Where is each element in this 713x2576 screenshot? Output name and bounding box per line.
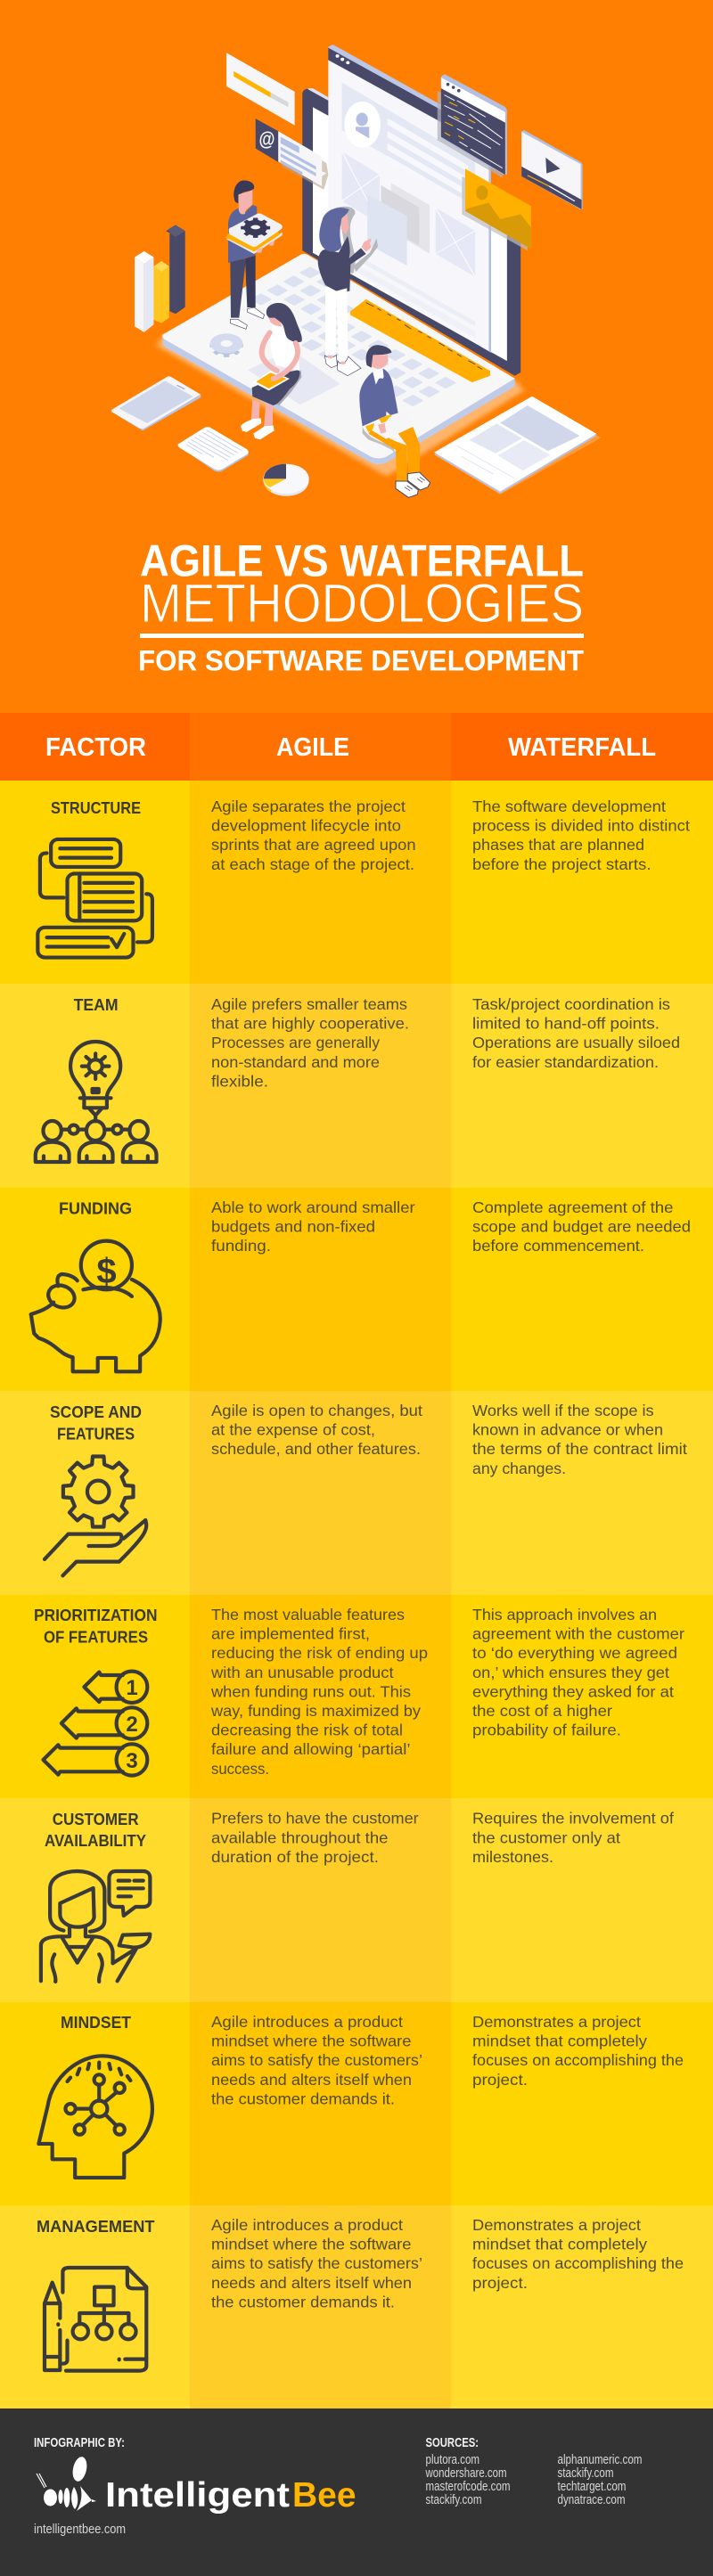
text: waterfall mindset xyxy=(472,2013,684,2089)
card: email: @ xyxy=(259,128,275,151)
text: waterfall structure: phases that are planned xyxy=(472,836,644,854)
text: agile scope: at the expense of cost, xyxy=(211,1421,375,1439)
person: man with books xyxy=(225,180,283,329)
row: funding xyxy=(0,1188,713,1391)
text: agile management xyxy=(211,2216,422,2310)
text: agile team: non-standard and more xyxy=(211,1053,380,1071)
bar chart xyxy=(135,225,185,332)
text: agile prioritization: The most valuable features xyxy=(211,1606,405,1623)
text: waterfall prioritization: the cost of a higher xyxy=(472,1702,612,1720)
sources: techtarget.com xyxy=(558,2480,626,2494)
pie chart xyxy=(263,464,309,496)
icon: head with network xyxy=(38,2056,152,2178)
person: standing woman legs xyxy=(324,287,361,376)
text: waterfall prioritization: This approach involves an xyxy=(472,1606,657,1623)
sources: wondershare.com xyxy=(425,2466,506,2481)
row: team xyxy=(0,984,713,1188)
text: agile funding xyxy=(211,1198,415,1255)
text: agile management: needs and alters itself when xyxy=(211,2274,412,2292)
logo: wordmark xyxy=(105,2476,356,2515)
logo: wordmark: Intelligent xyxy=(105,2476,290,2515)
ruler xyxy=(350,299,490,382)
text: waterfall team xyxy=(472,995,680,1071)
text: waterfall prioritization: to ‘do everything we agreed xyxy=(472,1644,677,1662)
laptop base xyxy=(157,254,524,477)
row: customer availability: CUSTOMER xyxy=(53,1811,139,1828)
text: waterfall scope: known in advance or when xyxy=(472,1421,663,1439)
sources: alphanumeric.com xyxy=(558,2453,642,2467)
text: waterfall mindset: project. xyxy=(472,2071,528,2089)
orange background xyxy=(0,0,713,713)
text: agile management: mindset where the software xyxy=(211,2236,412,2253)
small gear xyxy=(209,333,243,357)
row: management xyxy=(0,2205,713,2408)
text: agile customer: available throughout the xyxy=(211,1828,389,1846)
text: waterfall scope: Works well if the scope is xyxy=(472,1402,654,1419)
table header: WATERFALL xyxy=(508,733,656,762)
text: agile prioritization: when funding runs out. This xyxy=(210,1682,411,1700)
text: agile structure: development lifecycle into xyxy=(211,817,401,835)
text: waterfall customer: milestones. xyxy=(472,1848,553,1866)
text: agile mindset xyxy=(211,2013,422,2107)
person: standing woman xyxy=(318,207,378,293)
icon: customer with speech bubble xyxy=(41,1871,150,1982)
text: waterfall management: focuses on accomplishing the xyxy=(472,2254,684,2272)
text: waterfall management: mindset that completely xyxy=(472,2236,647,2253)
text: waterfall scope: the terms of the contract limit xyxy=(472,1440,687,1458)
text: agile management: Agile introduces a product xyxy=(211,2216,403,2234)
text: agile prioritization: reducing the risk of ending up xyxy=(211,1644,428,1662)
person: sitting man with laptop xyxy=(359,345,430,497)
row: scope and features: SCOPE AND xyxy=(50,1403,142,1421)
text: waterfall management: project. xyxy=(472,2274,528,2292)
text: agile structure: at each stage of the project. xyxy=(211,855,414,873)
title: AGILE VS WATERFALL xyxy=(140,536,584,586)
text: agile mindset: needs and alters itself when xyxy=(211,2071,412,2089)
card: progress bar xyxy=(226,53,295,126)
text: waterfall customer: Requires the involvement of xyxy=(472,1810,674,1828)
icon: numbered arrows: 2 xyxy=(126,1713,138,1737)
icon: numbered arrows xyxy=(43,1672,147,1776)
text: agile structure xyxy=(211,797,416,873)
text: waterfall prioritization: probability of failure. xyxy=(472,1721,621,1739)
row: structure: STRUCTURE xyxy=(51,799,141,817)
text: waterfall funding: before commencement. xyxy=(472,1237,644,1255)
text: waterfall funding: Complete agreement of the xyxy=(472,1198,674,1216)
row: prioritization of features: PRIORITIZATION xyxy=(34,1607,157,1624)
table header xyxy=(0,713,713,781)
card: email xyxy=(256,119,328,190)
text: waterfall prioritization xyxy=(472,1606,684,1739)
text: agile structure: sprints that are agreed upon xyxy=(211,836,416,854)
text: waterfall management xyxy=(472,2216,684,2292)
card: picture xyxy=(462,168,531,250)
row: management: MANAGEMENT xyxy=(37,2218,155,2236)
text: waterfall scope xyxy=(472,1402,687,1477)
title: FOR SOFTWARE DEVELOPMENT xyxy=(138,645,584,677)
text: waterfall prioritization: agreement with the customer xyxy=(472,1625,684,1643)
row: scope and features xyxy=(0,1391,713,1595)
text: waterfall customer xyxy=(472,1810,674,1866)
text: agile funding: funding. xyxy=(211,1237,271,1255)
row: team: TEAM xyxy=(74,996,119,1014)
text: agile scope xyxy=(211,1402,422,1458)
text: agile prioritization: are implemented first, xyxy=(211,1625,370,1643)
text: agile customer: Prefers to have the customer xyxy=(211,1810,419,1828)
text: waterfall funding: scope and budget are needed xyxy=(472,1218,691,1236)
text: agile scope: schedule, and other features. xyxy=(211,1440,421,1458)
text: waterfall team: limited to hand-off points. xyxy=(472,1015,660,1033)
text: waterfall prioritization: on,’ which ensures they get xyxy=(472,1664,669,1681)
title xyxy=(138,536,584,677)
icon: structure xyxy=(37,839,152,958)
icon: piggy bank xyxy=(31,1241,160,1371)
card: video player xyxy=(521,130,583,209)
sources: plutora.com xyxy=(426,2453,479,2467)
text: agile funding: budgets and non-fixed xyxy=(211,1218,375,1236)
icon: numbered arrows: 3 xyxy=(126,1749,138,1773)
sources xyxy=(425,2436,642,2507)
text: waterfall mindset: Demonstrates a project xyxy=(472,2013,641,2031)
footer xyxy=(0,2408,713,2576)
text: agile team xyxy=(211,995,409,1090)
text: waterfall team: Task/project coordination is xyxy=(472,995,670,1013)
icon: team idea xyxy=(36,1042,157,1162)
row: prioritization of features xyxy=(0,1595,713,1798)
text: agile prioritization xyxy=(210,1606,428,1778)
icon: piggy bank: $ xyxy=(96,1252,117,1291)
sources: stackify.com xyxy=(426,2493,481,2507)
sources: SOURCES: xyxy=(426,2436,479,2450)
sources: dynatrace.com xyxy=(558,2493,626,2507)
text: agile mindset: Agile introduces a product xyxy=(211,2013,403,2031)
text: agile team: flexible. xyxy=(211,1072,268,1090)
text: agile prioritization: failure and allowing ‘partial’ xyxy=(211,1740,410,1758)
row: customer availability: AVAILABILITY xyxy=(45,1832,146,1850)
card: code window xyxy=(438,74,507,178)
text: agile customer: duration of the project. xyxy=(211,1848,379,1866)
icon: numbered arrows: 1 xyxy=(126,1676,138,1700)
row: customer availability xyxy=(0,1798,713,2002)
text: agile management: the customer demands it. xyxy=(211,2293,395,2310)
text: waterfall management: Demonstrates a project xyxy=(472,2216,641,2234)
text: waterfall mindset: focuses on accomplishing the xyxy=(472,2051,684,2069)
text: waterfall mindset: mindset that completely xyxy=(472,2032,647,2050)
table header: AGILE xyxy=(276,733,349,762)
logo: bee xyxy=(37,2456,96,2511)
laptop screen xyxy=(302,45,520,376)
credit xyxy=(34,2436,126,2537)
text: agile management: aims to satisfy the customers’ xyxy=(211,2254,422,2272)
text: agile scope: Agile is open to changes, but xyxy=(211,1402,422,1419)
text: waterfall scope: any changes. xyxy=(472,1460,566,1477)
row: mindset: MINDSET xyxy=(61,2014,131,2032)
text: agile prioritization: with an unusable product xyxy=(210,1664,394,1681)
sources: masterofcode.com xyxy=(426,2480,510,2494)
sources: stackify.com xyxy=(558,2466,613,2481)
text: agile mindset: the customer demands it. xyxy=(211,2089,395,2107)
text: agile mindset: aims to satisfy the customers’ xyxy=(211,2051,422,2069)
text: agile team: Agile prefers smaller teams xyxy=(211,995,407,1013)
text: agile prioritization: way, funding is maximized by xyxy=(210,1702,421,1720)
text: waterfall prioritization: everything they asked for at xyxy=(472,1682,674,1700)
title: METHODOLOGIES xyxy=(140,573,584,634)
credit: INFOGRAPHIC BY: xyxy=(34,2436,125,2450)
text: waterfall customer: the customer only at xyxy=(472,1828,620,1846)
text: waterfall structure: before the project starts. xyxy=(472,855,651,873)
device: note pad xyxy=(178,427,249,471)
person: sitting woman xyxy=(241,303,302,439)
text: agile mindset: mindset where the software xyxy=(211,2032,412,2050)
text: waterfall structure: process is divided into distinct xyxy=(472,817,690,835)
device: tablet xyxy=(111,376,201,430)
text: agile prioritization: success. xyxy=(211,1760,269,1778)
icon: gear in hand xyxy=(45,1456,146,1575)
table header: FACTOR xyxy=(45,733,146,762)
text: agile funding: Able to work around smaller xyxy=(211,1198,415,1216)
logo: wordmark: Bee xyxy=(292,2476,356,2515)
row: mindset xyxy=(0,2002,713,2205)
row: funding: FUNDING xyxy=(59,1199,132,1217)
device: newspaper xyxy=(434,397,601,495)
row: prioritization of features: OF FEATURES xyxy=(44,1629,148,1647)
text: agile team: that are highly cooperative. xyxy=(211,1015,409,1033)
text: agile prioritization: decreasing the risk of total xyxy=(211,1721,403,1739)
text: waterfall structure xyxy=(472,797,690,873)
row: structure xyxy=(0,781,713,984)
text: agile customer xyxy=(211,1810,419,1866)
icon: document with org chart xyxy=(45,2268,146,2371)
row: scope and features: FEATURES xyxy=(57,1425,135,1443)
text: waterfall funding xyxy=(472,1198,691,1255)
text: agile team: Processes are generally xyxy=(211,1034,380,1051)
hero illustration xyxy=(111,45,601,497)
text: waterfall team: Operations are usually siloed xyxy=(472,1034,680,1051)
text: waterfall structure: The software development xyxy=(472,797,666,815)
text: waterfall team: for easier standardization. xyxy=(472,1053,659,1071)
text: agile structure: Agile separates the project xyxy=(211,797,406,815)
credit: intelligentbee.com xyxy=(34,2523,126,2537)
